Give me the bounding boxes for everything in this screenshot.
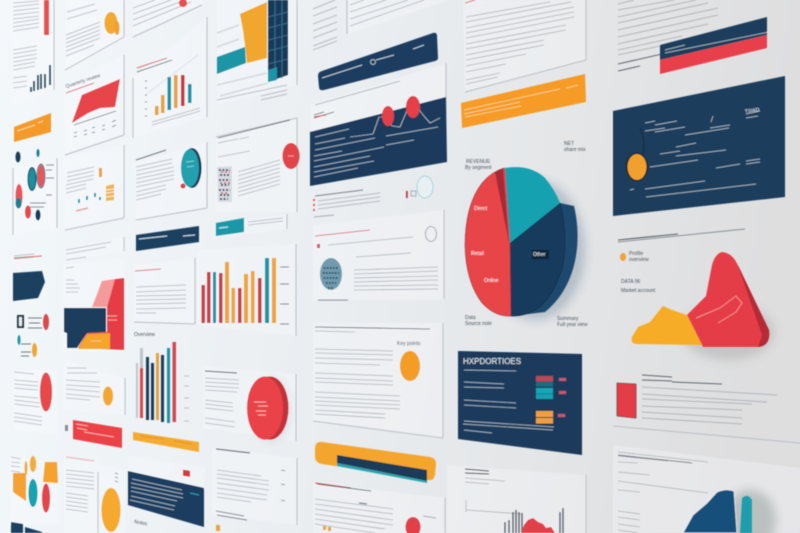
orange ellipse: [102, 488, 120, 532]
teal circle: [180, 148, 202, 188]
panel: orange and teal blobs: [10, 455, 60, 525]
label: mountain: Market account: [621, 288, 656, 294]
panel: infographic small card: [63, 145, 124, 230]
orange banner: [461, 74, 586, 128]
label: mountain: [621, 279, 656, 294]
red-teal circle: [16, 184, 22, 208]
teal slice: [505, 167, 560, 243]
orange block: [13, 473, 26, 501]
panel: orange text and blobs card: [65, 0, 124, 70]
orange drop: [30, 456, 36, 472]
red disc: [247, 376, 288, 441]
pie footnotes: Summary: [557, 316, 579, 322]
text block with orange dot: Profile: [629, 251, 643, 257]
panel: dark text box with red tag: Notes: [134, 519, 148, 527]
teal bar: [740, 496, 752, 533]
dark slice: [510, 203, 565, 316]
bars: [202, 258, 276, 323]
chart title: Quarterly review: [65, 73, 102, 90]
spike chart: [505, 508, 563, 533]
red pin right: [406, 96, 420, 118]
text column center-left: [313, 0, 447, 50]
pie labels: Online: [484, 278, 499, 284]
panel: red area chart: [63, 55, 124, 155]
right top text: [618, 0, 718, 71]
teal circle: [28, 168, 36, 190]
orange marker: [99, 168, 102, 177]
red square text block: [613, 375, 800, 443]
label: mountain: DATA 96: [621, 279, 640, 285]
panel: stepped bars: [217, 0, 297, 105]
panel: large red circle card: [203, 366, 296, 441]
panel: top center card: [347, 0, 447, 34]
red slice: [465, 168, 511, 316]
panel: left text with red ellipse: [13, 370, 57, 435]
dark and red header box: [660, 17, 769, 74]
small panels row: [14, 237, 124, 262]
orange circle: [626, 152, 648, 182]
pie labels: [471, 206, 549, 284]
dark grid: [268, 0, 288, 82]
panel: top-left text card: [12, 0, 54, 105]
orange dot: [103, 386, 113, 406]
panel: mosaic text card: [216, 118, 300, 212]
dark slot: [337, 455, 427, 481]
panel: vertical bars: Overview: [134, 332, 155, 338]
orange pill with dark slot: [315, 442, 436, 483]
dark panel with pins: [310, 96, 447, 186]
panel: lower center card: [313, 482, 445, 533]
peak glyph: [696, 296, 742, 323]
pie labels: Direct: [474, 206, 488, 212]
panel: lower right-center chart card: [447, 465, 586, 533]
red square: [617, 383, 636, 418]
red area: [72, 79, 120, 123]
panel: orange circle text card: [313, 322, 443, 438]
red circle: [406, 517, 420, 533]
panel label: TSI&D: [744, 107, 760, 115]
orange peak: [632, 306, 702, 345]
dark box: [128, 471, 204, 527]
red strip: [44, 0, 49, 35]
circle outline: [426, 226, 436, 242]
pie note: NET: [564, 141, 574, 147]
panel: text list card: [134, 258, 195, 324]
red peak: [687, 252, 769, 347]
red circle: [37, 164, 45, 188]
panel: small network icons: [17, 314, 49, 357]
panel: dark arrow: [13, 271, 45, 301]
mountain chart: [632, 252, 774, 360]
orange block right: [43, 462, 58, 483]
panel: bar chart: [133, 17, 207, 138]
panel: bar chart tall: [197, 244, 296, 336]
dot mosaic: [320, 258, 342, 290]
panel: teal label card: [216, 214, 287, 238]
pie labels: Other: [533, 252, 546, 258]
dark header box: [136, 226, 199, 251]
teal oval: [28, 479, 38, 507]
dark blob: [683, 490, 737, 533]
orange dot: [620, 253, 626, 261]
dark table panel: [458, 351, 582, 455]
panel: lower text card: [212, 448, 297, 531]
orange blobs: [104, 12, 118, 34]
orange polygon: [78, 333, 110, 349]
panel: mosaic globe text card: [313, 210, 444, 300]
pie footnotes: Source note: [465, 321, 492, 327]
small red circle: [25, 206, 31, 218]
mosaic: [217, 166, 232, 202]
panel: circle diagram: [13, 149, 57, 235]
bottom-left dark boxes: [11, 522, 42, 533]
teal block: [217, 47, 246, 74]
red polygon: [78, 278, 124, 350]
pie footnotes: [465, 315, 588, 328]
dark polygon: [64, 308, 106, 348]
orange steps: [240, 2, 267, 63]
pie footnotes: Data: [465, 315, 476, 321]
pie labels: Retail: [471, 251, 484, 257]
pink polygon: [92, 279, 115, 307]
pie note: share mix: [564, 147, 586, 153]
bars: [136, 342, 176, 423]
table cells: [536, 376, 566, 424]
panel: top text card right-center: [463, 0, 586, 92]
panel: top text card col 3: [133, 0, 202, 37]
panel: orange circle text card: Key points: [397, 341, 421, 347]
text block with orange dot: overview: [629, 257, 649, 263]
panel: red bar: [65, 420, 122, 448]
large dark panel: [613, 76, 785, 216]
text block with orange dot: [618, 229, 745, 263]
pie chart: [465, 167, 585, 320]
dark node: [16, 152, 20, 162]
pie heading: REVENUE: [466, 159, 491, 165]
red oval: [42, 484, 50, 512]
line graph: [350, 108, 440, 137]
red pin left: [382, 106, 394, 126]
panel: dark text box with red tag: [128, 455, 205, 527]
panel: teal circle card: [133, 142, 207, 220]
panel: orange bar: [133, 432, 199, 452]
bars: [155, 75, 192, 115]
pie heading: [465, 159, 492, 171]
panel title: HXPDORTIOES: [463, 357, 521, 366]
pie side: [512, 203, 578, 316]
small dark circle: [36, 210, 40, 220]
panel: text with teal globe: [314, 176, 433, 217]
orange circle: [400, 351, 420, 381]
red band: [660, 35, 767, 74]
red ellipse: [40, 372, 52, 412]
teal globe: [417, 176, 433, 198]
panel: card above dark panel: [311, 63, 446, 135]
panel: orange banner left: [14, 113, 51, 142]
pie footnotes: Full year view: [557, 322, 588, 328]
pie heading: By segment: [465, 165, 492, 171]
pie note: [564, 141, 586, 153]
dark pill banner: [318, 33, 438, 90]
panel: bottom right card: [613, 445, 800, 533]
shadow: [724, 490, 776, 533]
red button: [282, 143, 300, 169]
panel: orange ellipse card: [64, 455, 125, 533]
mini bar chart: [31, 65, 50, 92]
panel: orange dot text card: [63, 360, 125, 415]
panel: vertical bars: [134, 332, 189, 423]
orange legend: [106, 184, 114, 201]
panel: red shape card: [63, 258, 124, 352]
